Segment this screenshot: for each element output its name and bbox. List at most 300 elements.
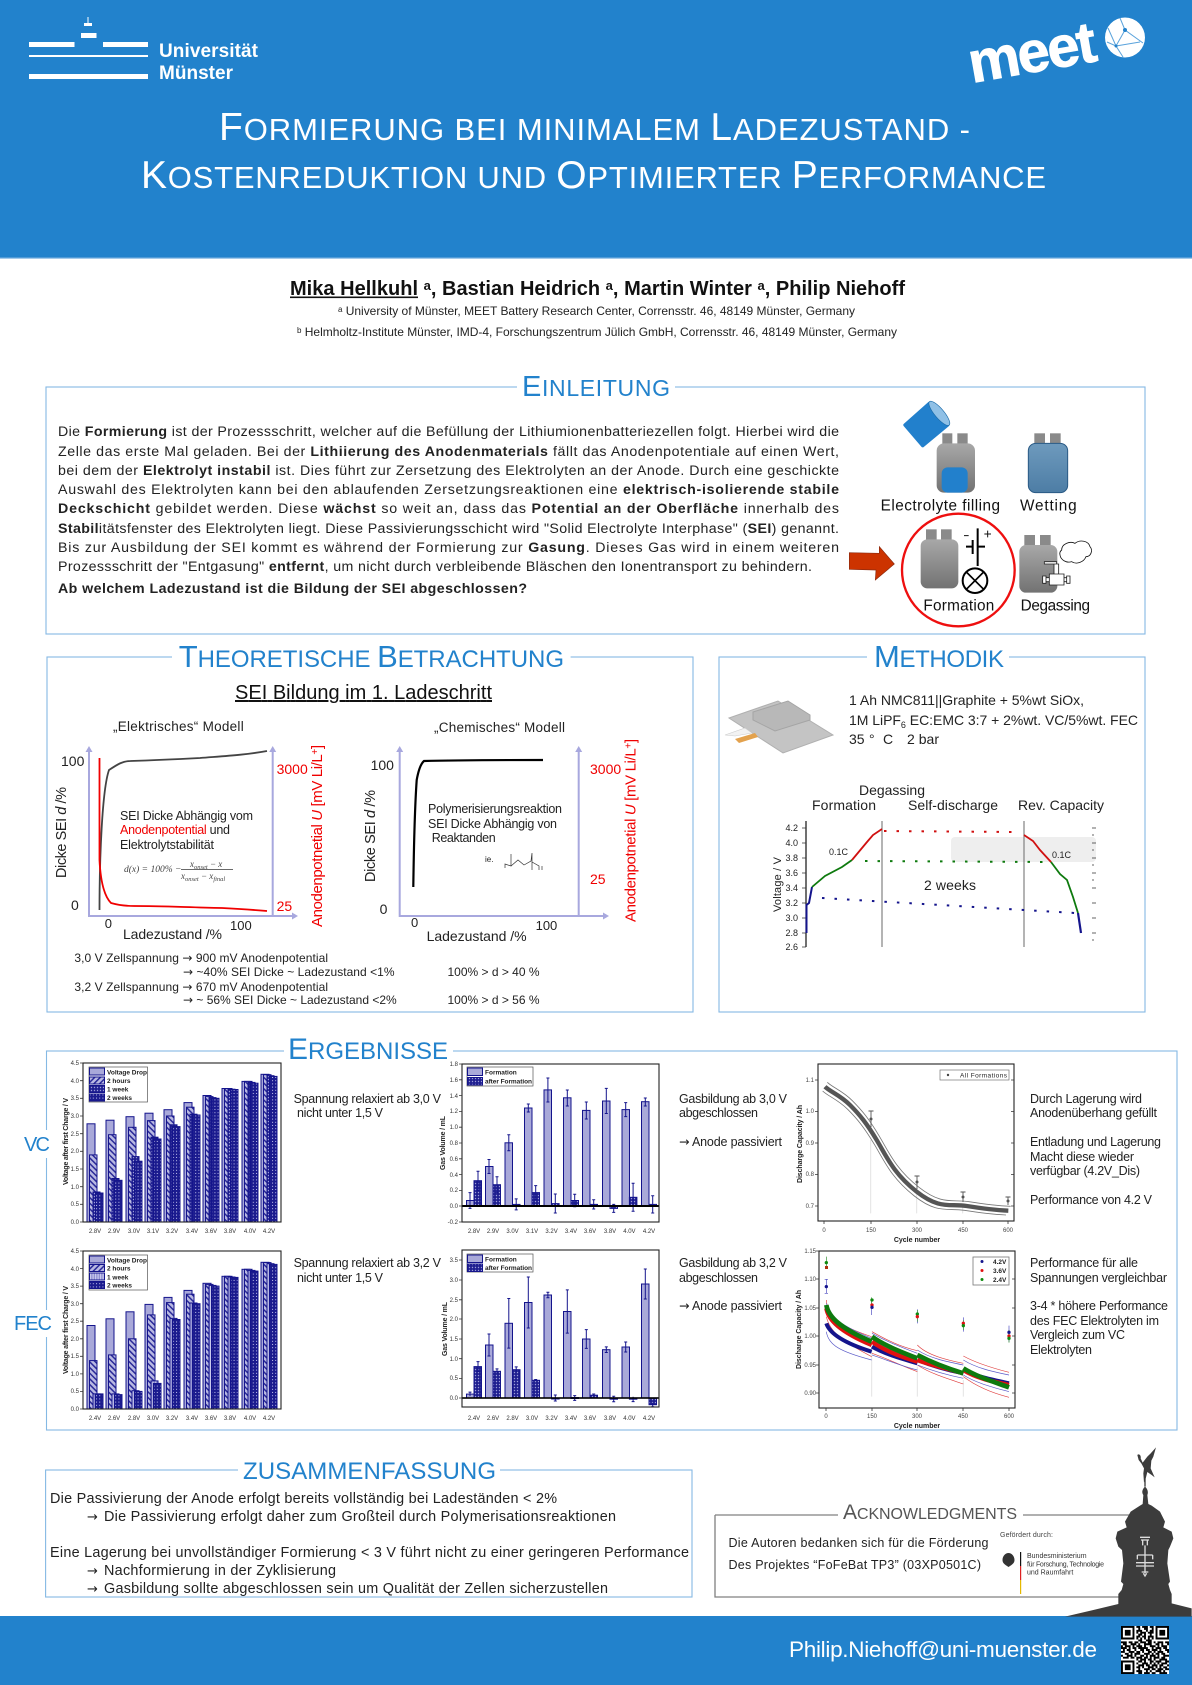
chart: voltage protocol: 4.0: [785, 838, 798, 848]
chart: VC voltage drop: 3.2V: [166, 1229, 178, 1235]
formula: onset: [185, 876, 199, 883]
chart: VC gas volume: 2.8V: [468, 1229, 480, 1235]
authors: a: [424, 278, 432, 293]
chart: FEC cycling: 0.95: [804, 1363, 817, 1369]
chart: VC gas volume: 1.2: [450, 1109, 459, 1115]
note: VC performance: verfügbar (4.2V_Dis): [1030, 1164, 1140, 1178]
chart: VC gas volume: 4.0V: [623, 1229, 636, 1235]
chart: FEC voltage drop: 4.0V: [244, 1416, 256, 1422]
note: VC performance: Entladung und Lagerung: [1030, 1135, 1161, 1149]
legend: 3.6V: [993, 1268, 1007, 1275]
note: FEC performance: Performance für alle: [1030, 1256, 1138, 1270]
panel: Methodik: [719, 639, 1145, 1012]
chart: VC cycling: 600: [1003, 1228, 1014, 1234]
icon: electrolyte filling: Electrolyte filling: [881, 498, 1000, 515]
subheading: SEI Bildung im 1. Ladeschritt: [235, 682, 492, 704]
chart: Chemisches Modell: Ladezustand /%: [427, 928, 527, 944]
chart: FEC gas volume: 1.5: [450, 1337, 459, 1343]
conclusions text: → ~40% SEI Dicke ~ Ladezustand <1%: [183, 965, 395, 979]
affiliations: University of Münster, MEET Battery Research Center, Corrensstr. 46, 48149 Münster, Germany: [342, 304, 855, 318]
chart: FEC voltage drop: 4.5: [71, 1249, 80, 1255]
chart: VC cycling: Cycle number: [894, 1237, 940, 1244]
legend: 2 hours: [107, 1266, 131, 1272]
chart: Elektrisches Modell: 0: [105, 916, 112, 931]
cell specification: EC:EMC 3:7 + 2%wt. VC/5%wt. FEC: [906, 712, 1138, 728]
cell specification: 1M LiPF: [849, 712, 901, 728]
chart: Elektrisches Modell: SEI Dicke Abhängig vom: [120, 809, 253, 823]
chart: Chemisches Modell: Reaktanden: [432, 831, 496, 845]
chart: VC gas volume: 1.8: [450, 1062, 459, 1068]
formula: x: [181, 871, 185, 881]
chart: VC voltage drop: 1.0: [71, 1185, 80, 1191]
chart: FEC cycling: 450: [958, 1414, 969, 1420]
legend: [940, 1070, 1009, 1080]
legend: 4.2V: [993, 1259, 1007, 1266]
chart: VC voltage drop: 2.0: [71, 1149, 80, 1155]
chart: FEC gas volume: 2.0: [450, 1317, 459, 1323]
cell specification: °: [869, 731, 875, 747]
icon: wetting: Wetting: [1020, 498, 1077, 515]
legend: 2 hours: [107, 1078, 131, 1085]
intro text: Zelle das erste Mal geladen. Bei der Lithiierung des Anodenmaterials fällt das Anodenpotentiale auf einen Wert,: [58, 444, 839, 460]
formula: onset: [194, 864, 208, 871]
conclusions text: [74, 951, 540, 1007]
note: FEC voltage: Spannung relaxiert ab 3,2 V: [294, 1256, 442, 1270]
note: FEC performance: 3-4 * höhere Performance: [1030, 1299, 1168, 1313]
chart: FEC gas volume: 2.6V: [487, 1416, 499, 1422]
icon: electrolyte filling: [881, 399, 1000, 515]
chart: FEC voltage drop: 2.8V: [128, 1416, 140, 1422]
molecule: [505, 853, 542, 870]
note: VC gas: [679, 1092, 788, 1149]
chart: VC cycling: 300: [912, 1228, 923, 1234]
chart: VC voltage drop: 3.0V: [128, 1229, 140, 1235]
chart: VC cycling: 0.9: [806, 1141, 815, 1147]
chart: voltage protocol: 2.6: [785, 942, 798, 952]
summary text: →: [87, 1510, 98, 1525]
chart: Elektrisches Modell: 100: [230, 918, 252, 933]
conclusions text: 3,0 V Zellspannung → 900 mV Anodenpotential: [74, 951, 328, 965]
chart: voltage protocol: 3.2: [785, 898, 798, 908]
icon: degassing: [1019, 535, 1091, 615]
intro text: Die Formierung ist der Prozessschritt, welcher auf die Befüllung der Lithiumionenbatteriezellen folgt. Hierbei wird die: [58, 424, 839, 440]
panel: Theoretische Betrachtung: [47, 639, 693, 1012]
note: FEC gas: abgeschlossen: [679, 1271, 758, 1285]
legend: [973, 1257, 1009, 1285]
intro text: Deckschicht gebildet werden. Diese wächst so weit an, dass das Potential an der Oberfläche innerhalb des: [58, 501, 839, 517]
chart: voltage protocol: [772, 782, 1104, 952]
cell specification: [849, 692, 1138, 747]
formula: − x: [208, 859, 222, 869]
chart: Elektrisches Modell: ]: [309, 745, 326, 749]
chart: VC gas volume: [440, 1062, 659, 1235]
chart: VC cycling: 450: [958, 1228, 969, 1234]
summary text: Nachformierung in der Zyklisierung: [104, 1563, 336, 1579]
note: VC gas: → Anode passiviert: [679, 1134, 783, 1149]
intro text: Prozessschritt der "Entgasung" entfernt, um nicht durch verbleibende Bläschen den Ionentransport zu behindern.: [58, 559, 812, 575]
note: VC performance: [1030, 1092, 1161, 1207]
chart: VC cycling: 1.0: [806, 1109, 815, 1115]
chart: FEC voltage drop: 2.4V: [89, 1416, 101, 1422]
chart: FEC cycling: 0.90: [804, 1391, 817, 1397]
authors: a: [757, 278, 765, 293]
conclusions text: → ~ 56% SEI Dicke ~ Ladezustand <2%: [183, 993, 397, 1007]
legend: Voltage Drop: [107, 1070, 147, 1076]
logo: Universität Münster: [29, 17, 259, 84]
note: VC performance: Durch Lagerung wird: [1030, 1092, 1142, 1106]
chart: FEC gas volume: 2.5: [450, 1298, 459, 1304]
intro text: Stabilitätsfenster des Elektrolyten liegt. Diese Passivierungsschicht wird "Solid Electrolyte Interphase" (SEI) genannt.: [58, 521, 839, 537]
chart: FEC gas volume: 0.5: [450, 1376, 459, 1382]
cell specification: C: [883, 731, 893, 747]
image: pouch cell: [725, 701, 833, 753]
chart: Elektrisches Modell: 25: [277, 898, 292, 914]
chart: VC voltage drop: Voltage after first Charge / V: [63, 1098, 70, 1185]
note: VC voltage: nicht unter 1,5 V: [297, 1106, 384, 1120]
chart: Chemisches Modell: Dicke SEI d /%: [363, 790, 379, 882]
cell specification: 35: [849, 731, 865, 747]
conclusions text: 100% > d > 40 %: [448, 965, 540, 979]
chart: voltage protocol: 4.2: [785, 823, 798, 833]
chart: VC voltage drop: 4.2V: [263, 1229, 275, 1235]
chart: Elektrisches Modell: 3000: [277, 761, 308, 777]
heading: Zusammenfassung: ZUSAMMENFASSUNG: [243, 1458, 496, 1485]
chart: FEC voltage drop: 2.0: [71, 1337, 80, 1343]
chart: voltage protocol: 2.8: [785, 928, 798, 938]
icon: arrow: [849, 547, 894, 580]
chart: FEC cycling: 0: [824, 1414, 828, 1420]
chart: FEC gas volume: 2.4V: [468, 1416, 480, 1422]
chart: Elektrisches Modell: Elektrolytstabilität: [120, 838, 215, 852]
panel: Einleitung: [46, 371, 1145, 634]
chart: Elektrisches Modell: 0: [71, 897, 79, 913]
logo: BMBF: [1000, 1532, 1104, 1594]
chart: Elektrisches Modell: „Elektrisches“ Modell: [113, 719, 244, 734]
note: FEC gas: Gasbildung ab 3,2 V: [679, 1256, 788, 1270]
cell specification: 1 Ah NMC811||Graphite + 5%wt SiOx,: [849, 692, 1084, 708]
chart: FEC gas volume: [442, 1250, 659, 1422]
chart: Chemisches Modell: [363, 720, 640, 944]
chart: FEC cycling: Discharge Capacity / Ah: [796, 1290, 803, 1369]
chart: FEC gas volume: 1.0: [450, 1357, 459, 1363]
legend: 2.4V: [993, 1277, 1007, 1284]
logo: BMBF: Bundesministerium: [1027, 1553, 1087, 1560]
chart: VC gas volume: 3.4V: [565, 1229, 577, 1235]
note: VC gas: Gasbildung ab 3,0 V: [679, 1092, 788, 1106]
legend: Voltage Drop: [107, 1258, 147, 1264]
heading: Ergebnisse: ERGEBNISSE: [288, 1033, 448, 1066]
chart: VC gas volume: 1.0: [450, 1125, 459, 1131]
chart: Chemisches Modell: 25: [590, 871, 606, 887]
chart: FEC cycling: 600: [1004, 1414, 1015, 1420]
chart: Chemisches Modell: 100: [371, 757, 394, 773]
chart: voltage protocol: 2 weeks: [924, 877, 976, 893]
heading: Acknowledgments: ACKNOWLEDGMENTS: [843, 1501, 1017, 1524]
formula: [124, 859, 233, 883]
legend: Formation: [485, 1256, 517, 1264]
chart: VC voltage drop: 3.6V: [205, 1229, 217, 1235]
chart: voltage protocol: 3.0: [785, 913, 798, 923]
legend: [467, 1067, 533, 1086]
intro text: [58, 424, 839, 597]
summary text: Die Passivierung der Anode erfolgt bereits vollständig bei Ladeständen < 2%: [50, 1491, 557, 1507]
illustration: tower silhouette: [1065, 1447, 1192, 1617]
logo: BMBF: für Forschung, Technologie: [1027, 1562, 1104, 1568]
chart: VC gas volume: 0.2: [450, 1188, 459, 1194]
note: FEC performance: Elektrolyten: [1030, 1343, 1092, 1357]
summary text: Eine Lagerung bei unvollständiger Formierung < 3 V führt nicht zu einer geringeren Performance: [50, 1545, 689, 1561]
chart: FEC voltage drop: 0.5: [71, 1389, 80, 1395]
chart: VC gas volume: 2.9V: [487, 1229, 499, 1235]
chart: VC gas volume: 3.1V: [526, 1229, 538, 1235]
chart: VC gas volume: 3.0V: [506, 1229, 519, 1235]
heading: Methodik: METHODIK: [874, 639, 1004, 674]
summary text: →: [87, 1582, 98, 1597]
chart: FEC voltage drop: 3.6V: [205, 1416, 217, 1422]
logo: meet: meet: [963, 9, 1101, 96]
affiliations: b: [297, 326, 302, 335]
acknowledgment text: [728, 1536, 989, 1572]
authors: a: [606, 278, 614, 293]
note: FEC performance: Vergleich zum VC: [1030, 1328, 1125, 1342]
chart: FEC voltage drop: 4.2V: [263, 1416, 275, 1422]
chart: VC gas volume: 0.8: [450, 1141, 459, 1147]
title: KOSTENREDUKTION UND OPTIMIERTER PERFORMANCE: [141, 154, 1046, 197]
note: FEC performance: des FEC Elektrolyten im: [1030, 1314, 1159, 1328]
chart: VC cycling: 1.1: [806, 1078, 815, 1084]
chart: voltage protocol: Rev. Capacity: [1018, 797, 1104, 813]
chart: VC cycling: [797, 1064, 1014, 1244]
authors: , Martin Winter: [613, 278, 757, 300]
chart: FEC cycling: 300: [912, 1414, 923, 1420]
cell specification: 6: [901, 720, 906, 730]
chart: voltage protocol: 3.6: [785, 868, 798, 878]
authors: Mika Hellkuhl: [290, 278, 418, 300]
summary text: →: [87, 1564, 98, 1579]
acknowledgment text: Die Autoren bedanken sich für die Förderung: [728, 1536, 989, 1550]
note: VC gas: abgeschlossen: [679, 1106, 758, 1120]
chart: Chemisches Modell: „Chemisches“ Modell: [434, 720, 565, 735]
chart: FEC gas volume: 4.2V: [643, 1416, 655, 1422]
chart: Chemisches Modell: SEI Dicke Abhängig von: [428, 817, 557, 831]
icon: formation: [902, 514, 1015, 626]
authors: [290, 278, 905, 339]
chart: voltage protocol: 3.4: [785, 883, 798, 893]
legend: after Formation: [485, 1078, 532, 1086]
chart: FEC cycling: 150: [867, 1414, 878, 1420]
chart: VC voltage drop: 3.5: [71, 1096, 80, 1102]
chart: FEC gas volume: 3.8V: [604, 1416, 616, 1422]
chart: VC gas volume: 3.2V: [545, 1229, 558, 1235]
chart: voltage protocol: Formation: [812, 797, 876, 813]
chart: FEC voltage drop: 3.5: [71, 1284, 80, 1290]
intro text: bei dem der Elektrolyt instabil ist. Dies führt zur Zersetzung des Elektrolyten an der Anode. Durch eine geschickte: [58, 463, 839, 479]
chart: FEC cycling: [796, 1249, 1015, 1430]
chart: Elektrisches Modell: [54, 719, 326, 942]
summary text: Die Passivierung erfolgt daher zum Großteil durch Polymerisationsreaktionen: [104, 1509, 616, 1525]
chart: FEC voltage drop: 3.2V: [166, 1416, 178, 1422]
chart: FEC voltage drop: Voltage after first Charge / V: [63, 1286, 70, 1374]
chart: FEC gas volume: Gas Volume / mL: [442, 1301, 449, 1356]
chart: voltage protocol: 0.1C: [1052, 850, 1072, 860]
panel: Ergebnisse: [14, 1033, 1177, 1430]
contact email: Philip.Niehoff@uni-muenster.de: [789, 1637, 1097, 1662]
chart: Elektrisches Modell: Anodenpotential und: [120, 823, 230, 837]
chart: Elektrisches Modell: Anodenpotnetial U [mV Li/L: [309, 754, 326, 927]
chart: VC voltage drop: 3.0: [71, 1114, 80, 1120]
chart: VC voltage drop: 0.5: [71, 1202, 80, 1208]
intro text: Auswahl des Elektrolyten kann bei den ablaufenden Zersetzungsreaktionen eine elektrisch-isolierende stabile: [58, 482, 839, 498]
legend: after Formation: [485, 1265, 532, 1272]
chart: FEC cycling: 1.10: [804, 1277, 817, 1283]
chart: VC voltage drop: [63, 1061, 281, 1235]
chart: voltage protocol: Degassing: [859, 782, 925, 798]
chart: FEC gas volume: 3.6V: [584, 1416, 596, 1422]
note: FEC gas: → Anode passiviert: [679, 1298, 783, 1313]
header band: [0, 0, 1192, 259]
title: FORMIERUNG BEI MINIMALEM LADEZUSTAND -: [219, 106, 970, 149]
chart: VC gas volume: 3.6V: [584, 1229, 596, 1235]
chart: FEC gas volume: 3.0: [450, 1278, 459, 1284]
chart: VC cycling: 0: [822, 1228, 826, 1234]
chart: VC voltage drop: 2.5: [71, 1132, 80, 1138]
note: FEC performance: [1030, 1256, 1168, 1357]
chart: FEC voltage drop: 2.6V: [108, 1416, 120, 1422]
chart: VC voltage drop: 3.1V: [147, 1229, 159, 1235]
chart: VC voltage drop: 4.5: [71, 1061, 80, 1067]
note: FEC gas: [679, 1256, 788, 1313]
chart: voltage protocol: Self-discharge: [908, 797, 998, 813]
icon: degassing: Degassing: [1021, 598, 1090, 615]
chart: Chemisches Modell: Anodenpotnetial U [mV Li/L: [622, 748, 640, 922]
authors: , Philip Niehoff: [765, 278, 905, 300]
chart: VC voltage drop: 2.8V: [89, 1229, 101, 1235]
chart: VC voltage drop: 0.0: [71, 1220, 80, 1226]
chart: Chemisches Modell: 3000: [590, 761, 621, 777]
logo: Universität Münster: Universität: [159, 41, 259, 62]
chart: Chemisches Modell: 0: [411, 915, 418, 930]
process diagram: [849, 399, 1091, 626]
legend: All Formations: [960, 1072, 1008, 1080]
heading: Einleitung: EINLEITUNG: [522, 371, 670, 403]
chart: FEC gas volume: 4.0V: [623, 1416, 636, 1422]
chart: Chemisches Modell: ie.: [485, 855, 493, 864]
chart: VC gas volume: 3.8V: [604, 1229, 616, 1235]
chart: FEC gas volume: 3.5: [450, 1258, 459, 1264]
legend: [89, 1067, 148, 1102]
legend: 2 weeks: [107, 1095, 132, 1102]
intro text: Bis zur Ausbildung der SEI kommt es während der Formierung zur Gasung. Dieses Gas wird in einem weiteren: [58, 540, 839, 556]
affiliations: [297, 304, 897, 339]
summary text: [50, 1491, 689, 1597]
chart: voltage protocol: 3.8: [785, 853, 798, 863]
heading: Theoretische Betrachtung: THEORETISCHE BETRACHTUNG: [179, 639, 564, 674]
chart: VC gas volume: 1.6: [450, 1078, 459, 1084]
cell specification: 2 bar: [907, 731, 939, 747]
logo: BMBF: Gefördert durch:: [1000, 1532, 1053, 1539]
label: VC: VC: [24, 1134, 50, 1156]
chart: Elektrisches Modell: Dicke SEI d /%: [54, 787, 70, 878]
chart: VC gas volume: 0.6: [450, 1157, 459, 1163]
legend: 2 weeks: [107, 1282, 132, 1290]
chart: VC gas volume: 4.2V: [643, 1229, 655, 1235]
chart: VC voltage drop: 1.5: [71, 1167, 80, 1173]
chart: Chemisches Modell: ]: [622, 739, 640, 743]
chart: FEC gas volume: 0.0: [450, 1396, 459, 1402]
chart: FEC cycling: 1.15: [804, 1249, 817, 1255]
legend: [467, 1254, 533, 1272]
legend: Formation: [485, 1070, 517, 1076]
chart: VC cycling: 0.8: [806, 1172, 815, 1178]
intro text: Ab welchem Ladezustand ist die Bildung der SEI abgeschlossen?: [58, 581, 527, 597]
chart: FEC voltage drop: 3.8V: [224, 1416, 236, 1422]
chart: FEC voltage drop: 4.0: [71, 1267, 80, 1273]
affiliations: Helmholtz-Institute Münster, IMD-4, Forschungszentrum Jülich GmbH, Corrensstr. 46, 48149 Münster, Germany: [301, 325, 897, 339]
note: VC voltage: Spannung relaxiert ab 3,0 V: [294, 1092, 442, 1106]
legend: [89, 1255, 148, 1290]
chart: FEC voltage drop: 3.4V: [186, 1416, 198, 1422]
chart: FEC gas volume: 3.0V: [526, 1416, 538, 1422]
chart: FEC cycling: 1.00: [804, 1334, 817, 1340]
chart: Chemisches Modell: 0: [380, 901, 388, 917]
acknowledgment text: Des Projektes “FoFeBat TP3” (03XP0501C): [728, 1558, 981, 1572]
chart: Elektrisches Modell: Ladezustand /%: [123, 926, 222, 942]
note: FEC voltage: [294, 1256, 442, 1285]
chart: FEC voltage drop: 1.5: [71, 1354, 80, 1360]
chart: FEC voltage drop: 3.0V: [147, 1416, 159, 1422]
title: [141, 106, 1046, 197]
chart: Elektrisches Modell: +: [310, 749, 321, 755]
panel: Acknowledgments: [715, 1501, 1130, 1597]
formula: x: [190, 859, 194, 869]
note: VC voltage: [294, 1092, 442, 1120]
formula: d(x) = 100% −: [124, 864, 181, 875]
conclusions text: 100% > d > 56 %: [448, 993, 540, 1007]
icon: wetting: [1020, 433, 1077, 515]
footer band: [0, 1616, 1192, 1685]
chart: FEC voltage drop: 3.0: [71, 1302, 80, 1308]
chart: VC gas volume: 0.4: [450, 1173, 459, 1179]
chart: VC voltage drop: 2.9V: [108, 1229, 120, 1235]
icon: formation: Formation: [923, 598, 994, 615]
note: VC performance: Anodenüberhang gefüllt: [1030, 1106, 1158, 1120]
chart: VC cycling: 150: [866, 1228, 877, 1234]
authors: , Bastian Heidrich: [431, 278, 606, 300]
panel: Zusammenfassung: [46, 1458, 692, 1597]
chart: Chemisches Modell: +: [624, 743, 634, 749]
chart: FEC voltage drop: [63, 1249, 281, 1422]
note: VC performance: Macht diese wieder: [1030, 1150, 1134, 1164]
chart: VC gas volume: 1.4: [450, 1094, 459, 1100]
note: FEC voltage: nicht unter 1,5 V: [297, 1271, 384, 1285]
chart: VC cycling: 0.7: [806, 1204, 815, 1210]
chart: VC cycling: Discharge Capacity / Ah: [797, 1105, 804, 1183]
affiliations: a: [338, 305, 343, 314]
chart: VC voltage drop: 3.8V: [224, 1229, 236, 1235]
formula: − x: [199, 871, 213, 881]
conclusions text: 3,2 V Zellspannung → 670 mV Anodenpotential: [74, 980, 328, 994]
chart: VC voltage drop: 3.4V: [186, 1229, 198, 1235]
chart: FEC voltage drop: 1.0: [71, 1372, 80, 1378]
chart: voltage protocol: Voltage / V: [772, 856, 784, 912]
chart: FEC cycling: Cycle number: [894, 1423, 940, 1430]
chart: FEC voltage drop: 0.0: [71, 1407, 80, 1413]
chart: VC gas volume: -0.2: [448, 1220, 459, 1226]
chart: voltage protocol: 0.1C: [829, 847, 849, 857]
summary text: Gasbildung sollte abgeschlossen sein um Qualität der Zellen sicherzustellen: [104, 1581, 608, 1597]
QR code: [1121, 1626, 1169, 1674]
chart: VC voltage drop: 4.0: [71, 1079, 80, 1085]
